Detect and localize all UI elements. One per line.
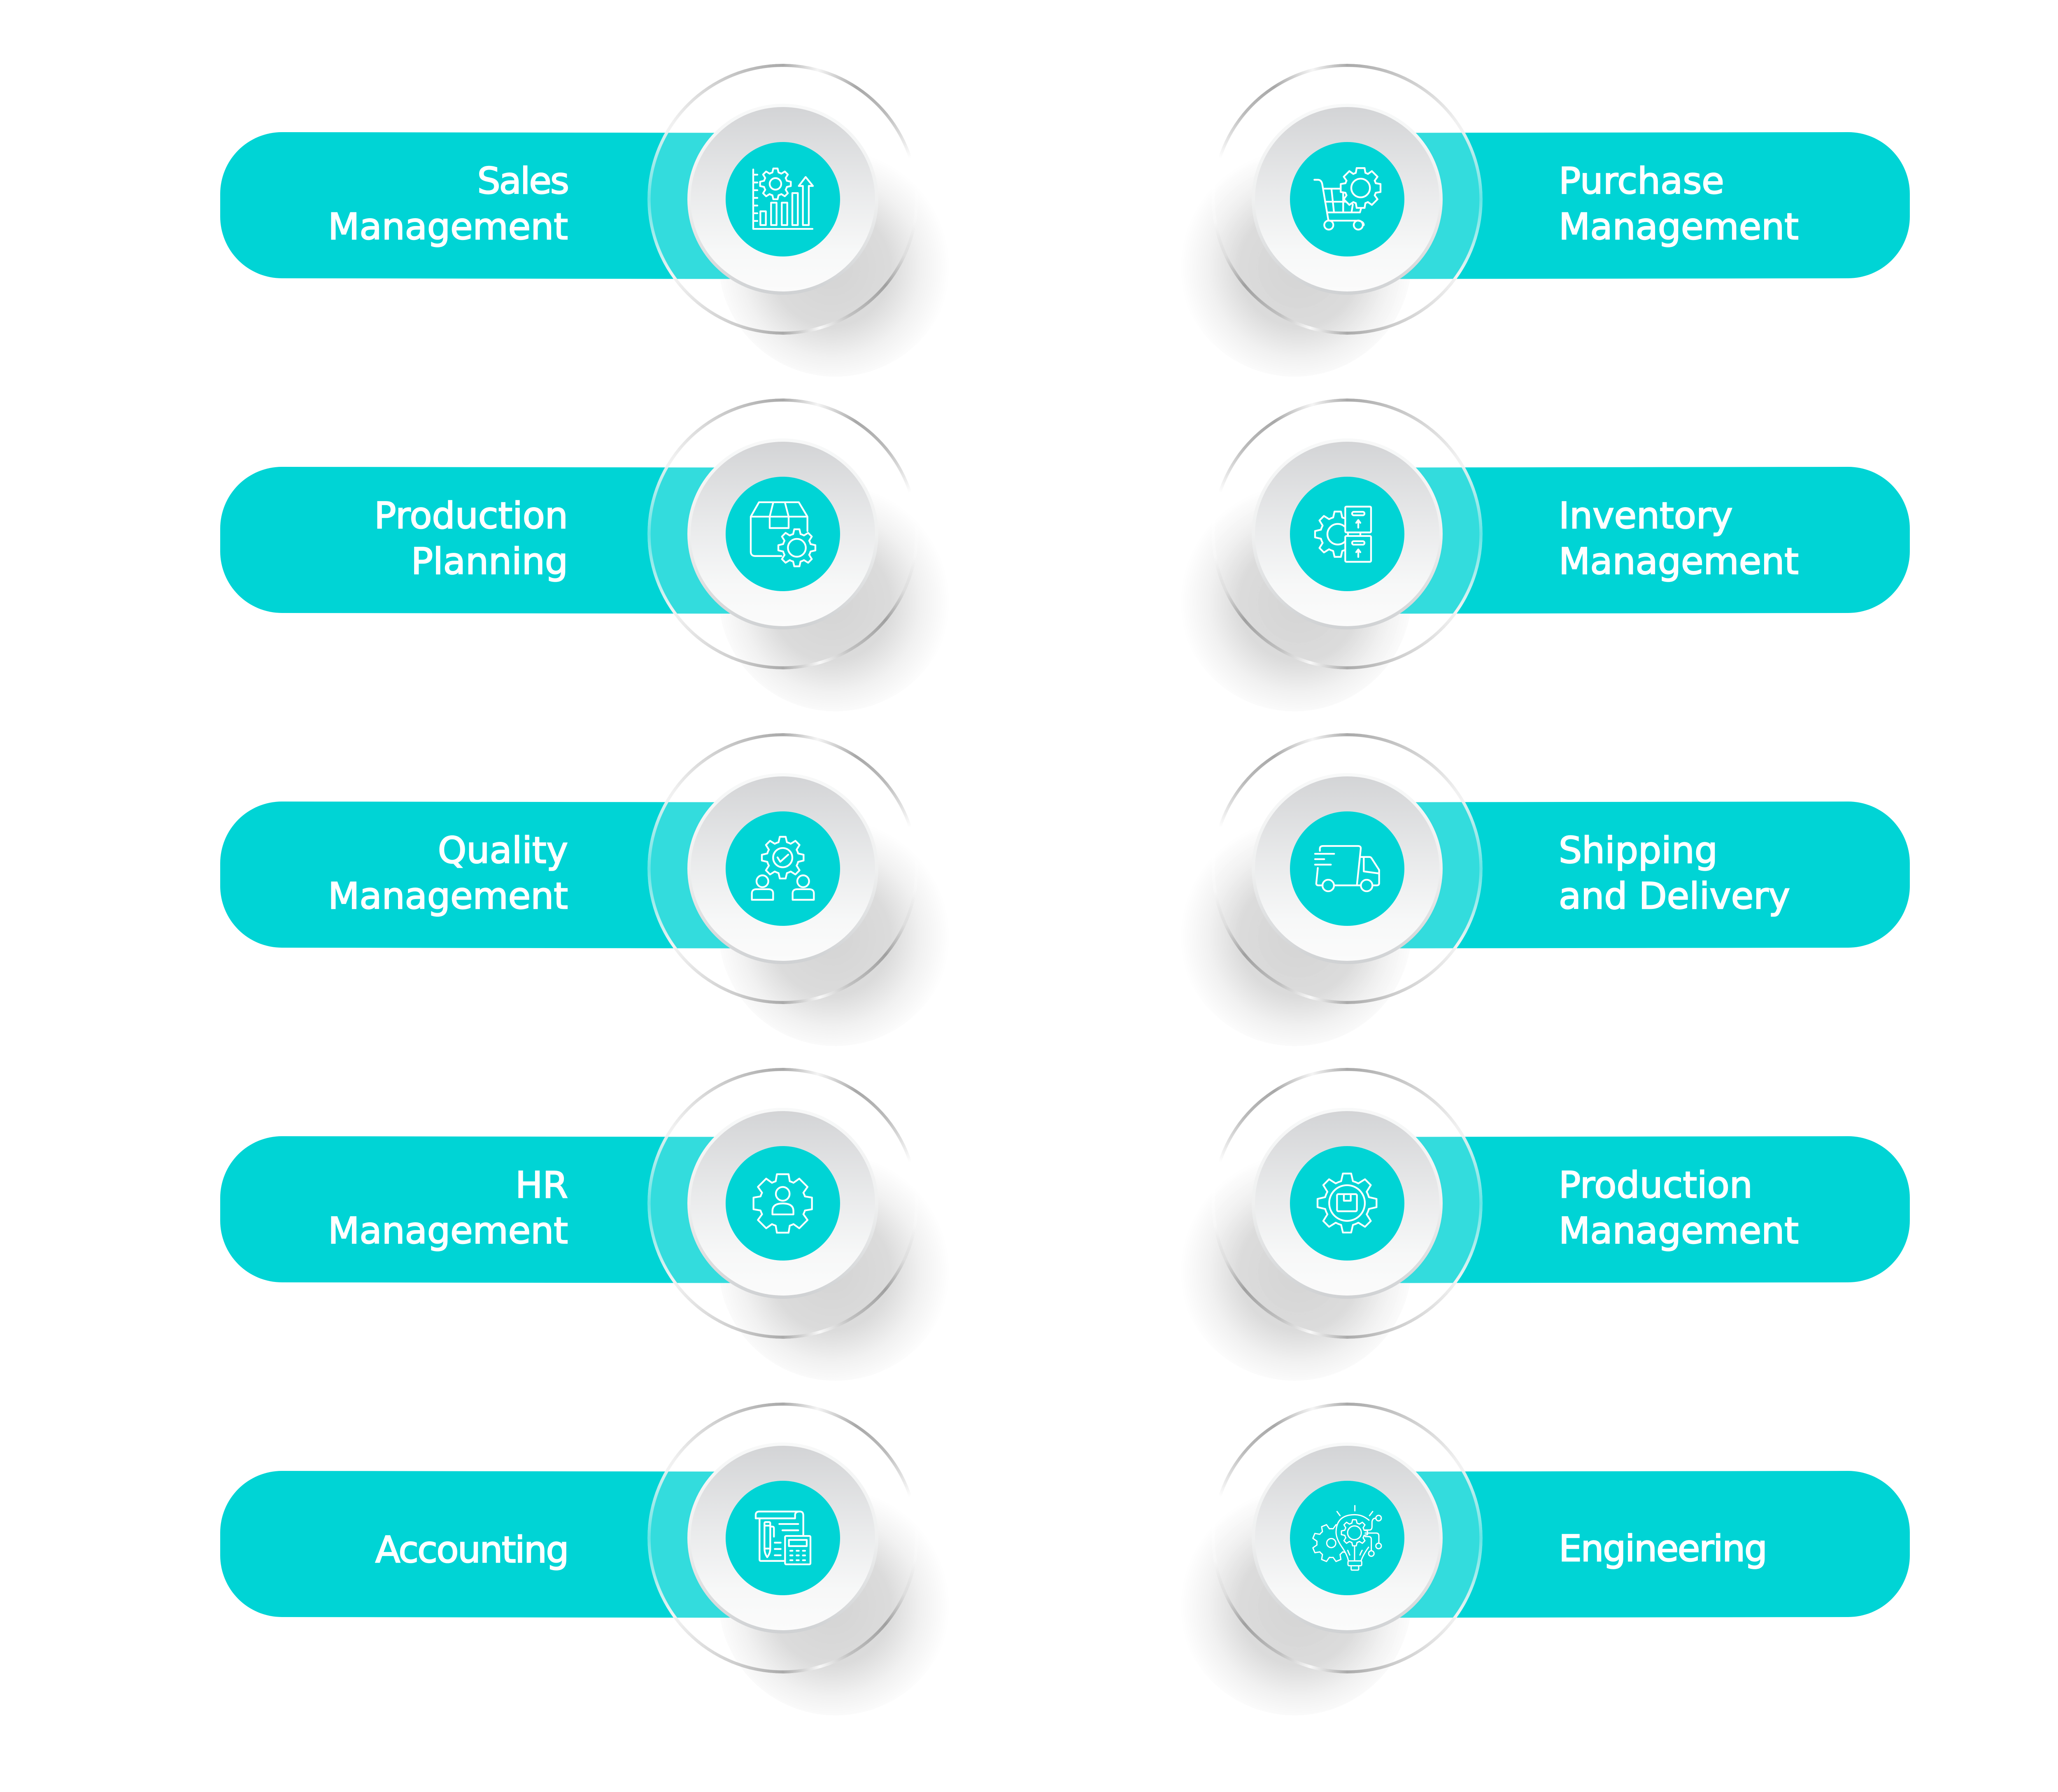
label: Production Planning: Production bbox=[374, 494, 568, 537]
label: Quality Management: Management bbox=[328, 875, 568, 917]
icon: document, pen and calculator bbox=[700, 1474, 864, 1638]
panel: HR Management bbox=[218, 1066, 959, 1387]
icon: gear with check and two people bbox=[700, 799, 864, 963]
label: HR Management bbox=[280, 1162, 568, 1254]
label: HR Management: HR bbox=[515, 1164, 568, 1206]
panel: Production Management bbox=[1171, 1066, 1912, 1387]
icon: sales chart with gear and arrow bbox=[700, 124, 864, 288]
label: Engineering: Engineering bbox=[1559, 1527, 1767, 1570]
icon: delivery truck bbox=[1276, 799, 1441, 963]
label: Purchase Management: Management bbox=[1559, 205, 1799, 248]
icon: gear with package bbox=[1276, 1136, 1441, 1301]
panel: Production Planning bbox=[218, 396, 959, 718]
panel: Sales Management bbox=[218, 62, 959, 383]
label: Production Management: Management bbox=[1559, 1209, 1799, 1252]
icon: light bulb with gears and circuits bbox=[1276, 1474, 1441, 1638]
label: Shipping and Delivery: and Delivery bbox=[1559, 875, 1790, 917]
label: Quality Management: Quality bbox=[438, 829, 568, 872]
label: Inventory Management: Inventory bbox=[1559, 494, 1733, 537]
label: Purchase Management: Purchase bbox=[1559, 160, 1724, 202]
icon: gear with person bbox=[700, 1136, 864, 1301]
panel: Shipping and Delivery bbox=[1171, 731, 1912, 1052]
label: Production Management: Production bbox=[1559, 1164, 1753, 1206]
label: Shipping and Delivery bbox=[1559, 827, 1847, 919]
label: Purchase Management bbox=[1559, 158, 1847, 249]
panel: Purchase Management bbox=[1171, 62, 1912, 383]
panel: Accounting bbox=[218, 1401, 959, 1722]
label: Inventory Management: Management bbox=[1559, 540, 1799, 583]
label: Shipping and Delivery: Shipping bbox=[1559, 829, 1718, 872]
icon: shopping cart with gear bbox=[1276, 124, 1441, 288]
icon: box with gear bbox=[700, 461, 864, 626]
label: Sales Management: Management bbox=[328, 205, 568, 248]
label: Sales Management bbox=[280, 158, 568, 249]
icon: gear with stacked boxes bbox=[1276, 461, 1441, 626]
label: Production Planning: Planning bbox=[411, 540, 568, 583]
label: HR Management: Management bbox=[328, 1209, 568, 1252]
panel: Quality Management bbox=[218, 731, 959, 1052]
label: Production Management bbox=[1559, 1162, 1847, 1254]
label: Sales Management: Sales bbox=[477, 160, 568, 202]
label: Production Planning bbox=[280, 493, 568, 584]
label: Quality Management bbox=[280, 827, 568, 919]
panel: Engineering bbox=[1171, 1401, 1912, 1722]
label: Inventory Management bbox=[1559, 493, 1847, 584]
panel: Inventory Management bbox=[1171, 396, 1912, 718]
label: Accounting: Accounting bbox=[375, 1529, 568, 1571]
